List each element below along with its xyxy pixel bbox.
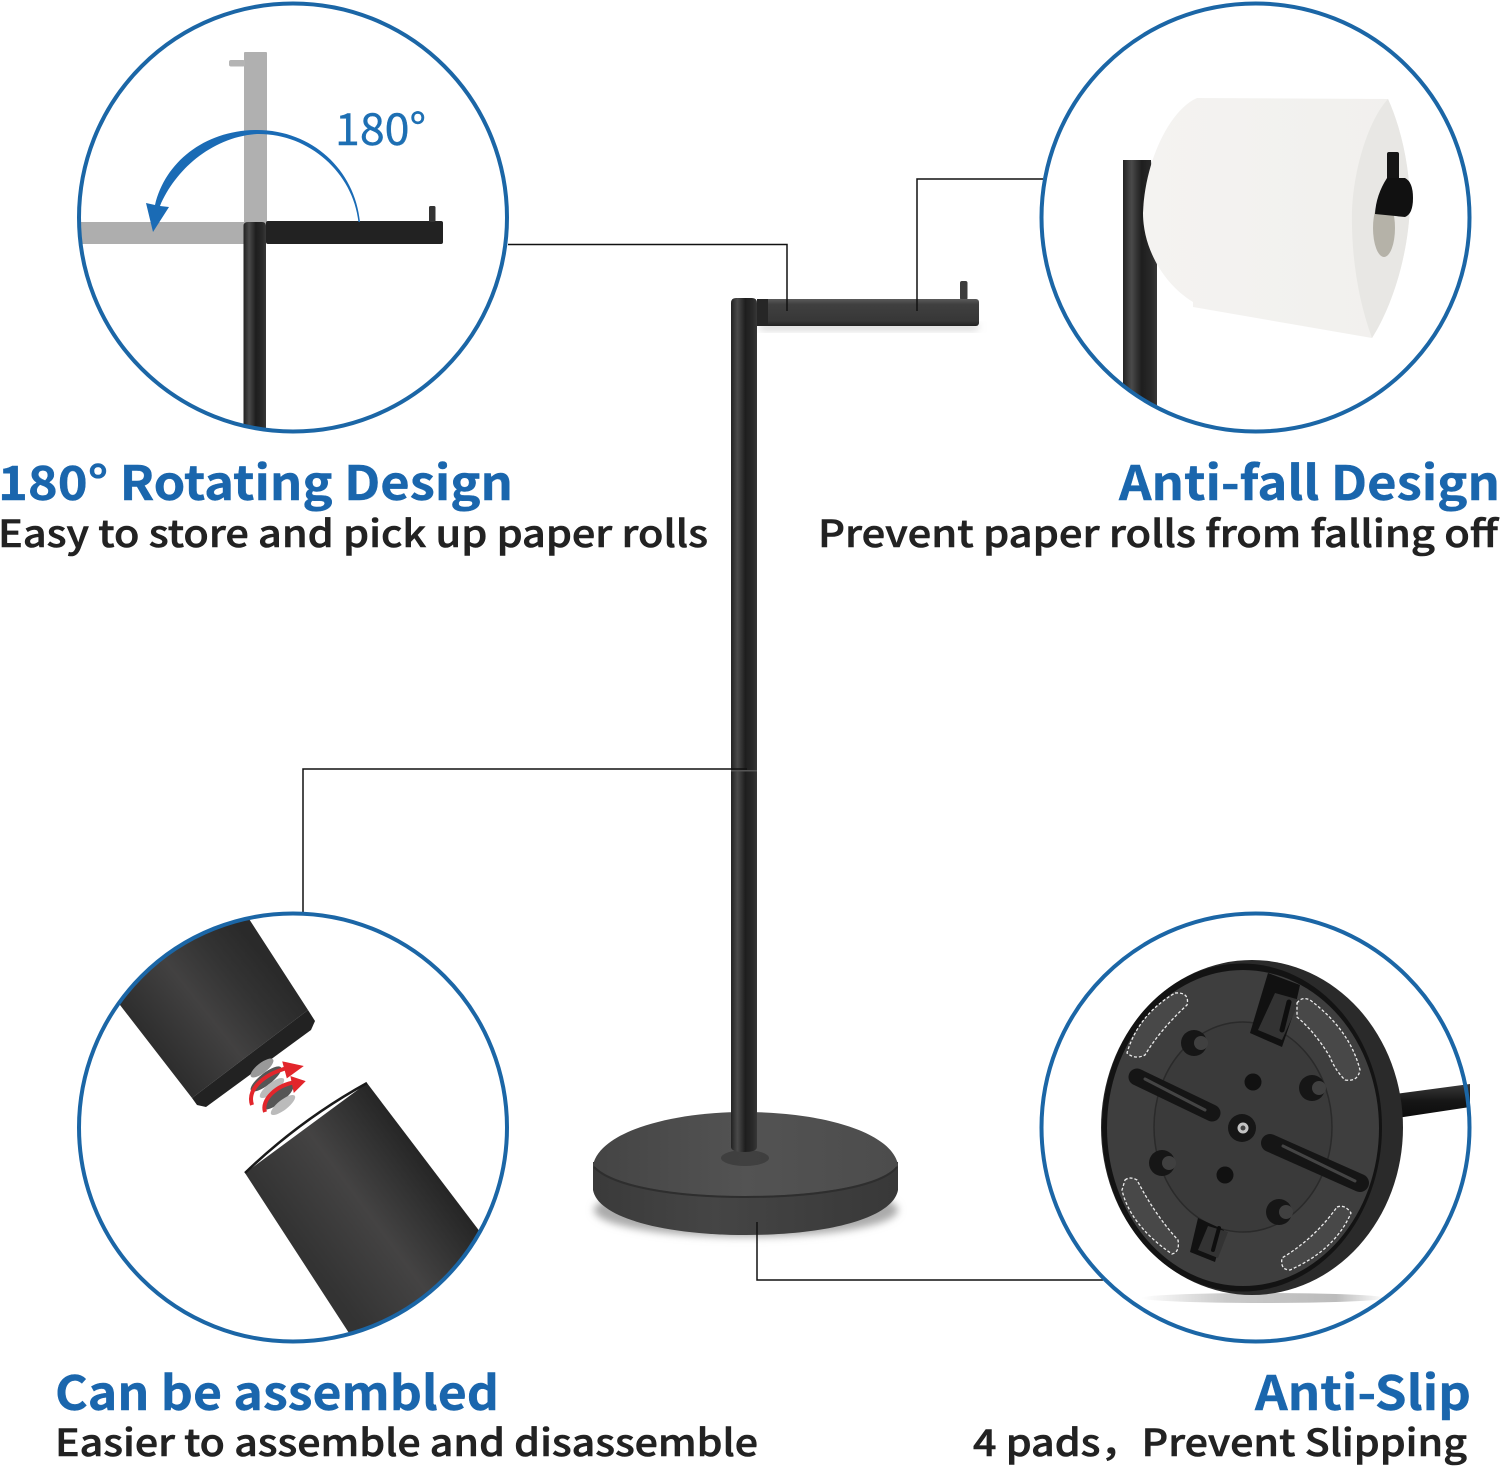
connector: rotating design callout [508, 244, 787, 311]
vertical post [731, 298, 757, 1152]
stem [1395, 1084, 1470, 1118]
connector: assembly callout [303, 769, 747, 913]
circle outline [79, 4, 507, 432]
panel: anti-fall design [1042, 4, 1470, 432]
circle outline [1042, 4, 1470, 432]
heading: can be assembled: Can be assembled [55, 1355, 499, 1424]
circle outline [79, 914, 507, 1342]
connector: anti-slip callout [757, 1222, 1103, 1280]
label: 180 degrees: 180° [335, 94, 426, 158]
round base [593, 1112, 898, 1235]
panel: assembly joint [79, 905, 507, 1350]
heading: anti-slip: Anti-Slip [1254, 1355, 1471, 1424]
central product: toilet paper stand [593, 281, 979, 1237]
circle outline [1042, 914, 1470, 1342]
separated tubes [90, 905, 490, 1350]
mounting pegs and holes [1149, 1030, 1326, 1225]
arm shadow [760, 325, 978, 329]
floor shadow [1141, 1293, 1385, 1303]
panel: anti-slip base underside [1042, 914, 1470, 1342]
text: rotating design description: Easy to store and pick up paper rolls [0, 504, 708, 558]
text: anti-slip description: 4 pads，Prevent Slipping [973, 1413, 1467, 1467]
post with paper roll [1123, 98, 1413, 432]
horizontal arm [757, 299, 979, 326]
rotating arm illustration [80, 52, 443, 432]
panel: 180 degree rotating design [79, 4, 507, 432]
icon: red turning arrows [251, 1064, 302, 1112]
text: assembly description: Easier to assemble and disassemble [55, 1413, 758, 1467]
pin on arm [960, 281, 968, 300]
heading: anti-fall design: Anti-fall Design [1118, 445, 1500, 514]
anti-slip pads [1122, 993, 1360, 1270]
base shadow [594, 1183, 898, 1237]
text: anti-fall description: Prevent paper rolls from falling off [818, 504, 1500, 558]
connector: anti-fall callout [917, 179, 1043, 311]
icon: blue rotation arrow [146, 130, 360, 232]
heading: 180 rotating design: 180° Rotating Design [0, 445, 513, 514]
base disc underside [1101, 960, 1403, 1295]
